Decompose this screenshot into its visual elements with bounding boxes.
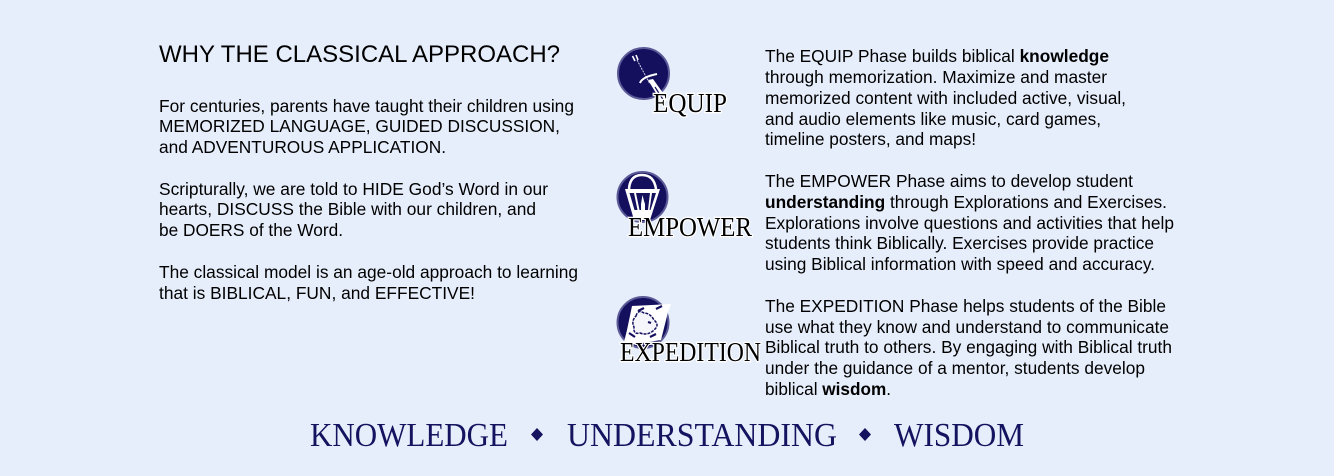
- text block: equip description: [765, 47, 1126, 149]
- icon: empower badge: [618, 172, 752, 242]
- icon: diamond separator: [531, 428, 543, 441]
- footer banner: knowledge, understanding, wisdom: [310, 417, 1024, 454]
- text block: scripture paragraph: be DOERS of the Word.: [159, 221, 343, 240]
- text block: empower description: [765, 172, 1174, 274]
- text block: expedition description: The EXPEDITION Phase helps students of the Bible: [765, 297, 1166, 316]
- text block: classical model paragraph: that is BIBLICAL, FUN, and EFFECTIVE!: [159, 284, 475, 303]
- footer banner: knowledge, understanding, wisdom: KNOWLEDGE: [310, 417, 508, 454]
- text block: empower description: The EMPOWER Phase aims to develop student: [765, 172, 1133, 191]
- text block: centuries paragraph: and ADVENTUROUS APPLICATION.: [159, 138, 446, 157]
- label: EQUIP: EQUIP: [653, 88, 727, 118]
- text block: centuries paragraph: [159, 97, 574, 157]
- text block: empower description: students think Biblically. Exercises provide practice: [765, 234, 1154, 253]
- text block: equip description: through memorization. Maximize and master: [765, 68, 1107, 87]
- text block: empower description: Explorations involve questions and activities that help: [765, 214, 1174, 233]
- icon: diamond separator: [859, 428, 871, 441]
- text block: centuries paragraph: MEMORIZED LANGUAGE, GUIDED DISCUSSION,: [159, 117, 560, 136]
- icon: equip badge: [618, 48, 727, 118]
- text block: scripture paragraph: [159, 180, 548, 240]
- text block: expedition description: Biblical truth to others. By engaging with Biblical truth: [765, 338, 1172, 357]
- text block: classical model paragraph: [159, 263, 578, 303]
- footer banner: knowledge, understanding, wisdom: WISDOM: [894, 417, 1024, 454]
- label: EXPEDITION: EXPEDITION: [620, 337, 761, 367]
- text block: equip description: memorized content with included active, visual,: [765, 89, 1126, 108]
- label: EMPOWER: EMPOWER: [628, 212, 752, 242]
- text block: centuries paragraph: For centuries, parents have taught their children using: [159, 97, 574, 116]
- text block: scripture paragraph: hearts, DISCUSS the Bible with our children, and: [159, 200, 536, 219]
- text block: equip description: timeline posters, and maps!: [765, 130, 976, 149]
- text block: expedition description: under the guidance of a mentor, students develop: [765, 359, 1145, 378]
- text block: equip description: and audio elements like music, card games,: [765, 110, 1101, 129]
- text block: empower description: using Biblical information with speed and accuracy.: [765, 255, 1155, 274]
- icon: expedition badge: [618, 297, 761, 367]
- title: WHY THE CLASSICAL APPROACH?: [159, 41, 560, 68]
- text block: scripture paragraph: Scripturally, we are told to HIDE God’s Word in our: [159, 180, 548, 199]
- text block: equip description: The EQUIP Phase builds biblical knowledge: [765, 47, 1109, 66]
- text block: classical model paragraph: The classical model is an age-old approach to learning: [159, 263, 578, 282]
- text block: expedition description: [765, 297, 1172, 399]
- text block: expedition description: biblical wisdom.: [765, 380, 891, 399]
- text block: empower description: understanding through Explorations and Exercises.: [765, 193, 1167, 212]
- text block: expedition description: use what they know and understand to communicate: [765, 318, 1169, 337]
- footer banner: knowledge, understanding, wisdom: UNDERSTANDING: [567, 417, 837, 454]
